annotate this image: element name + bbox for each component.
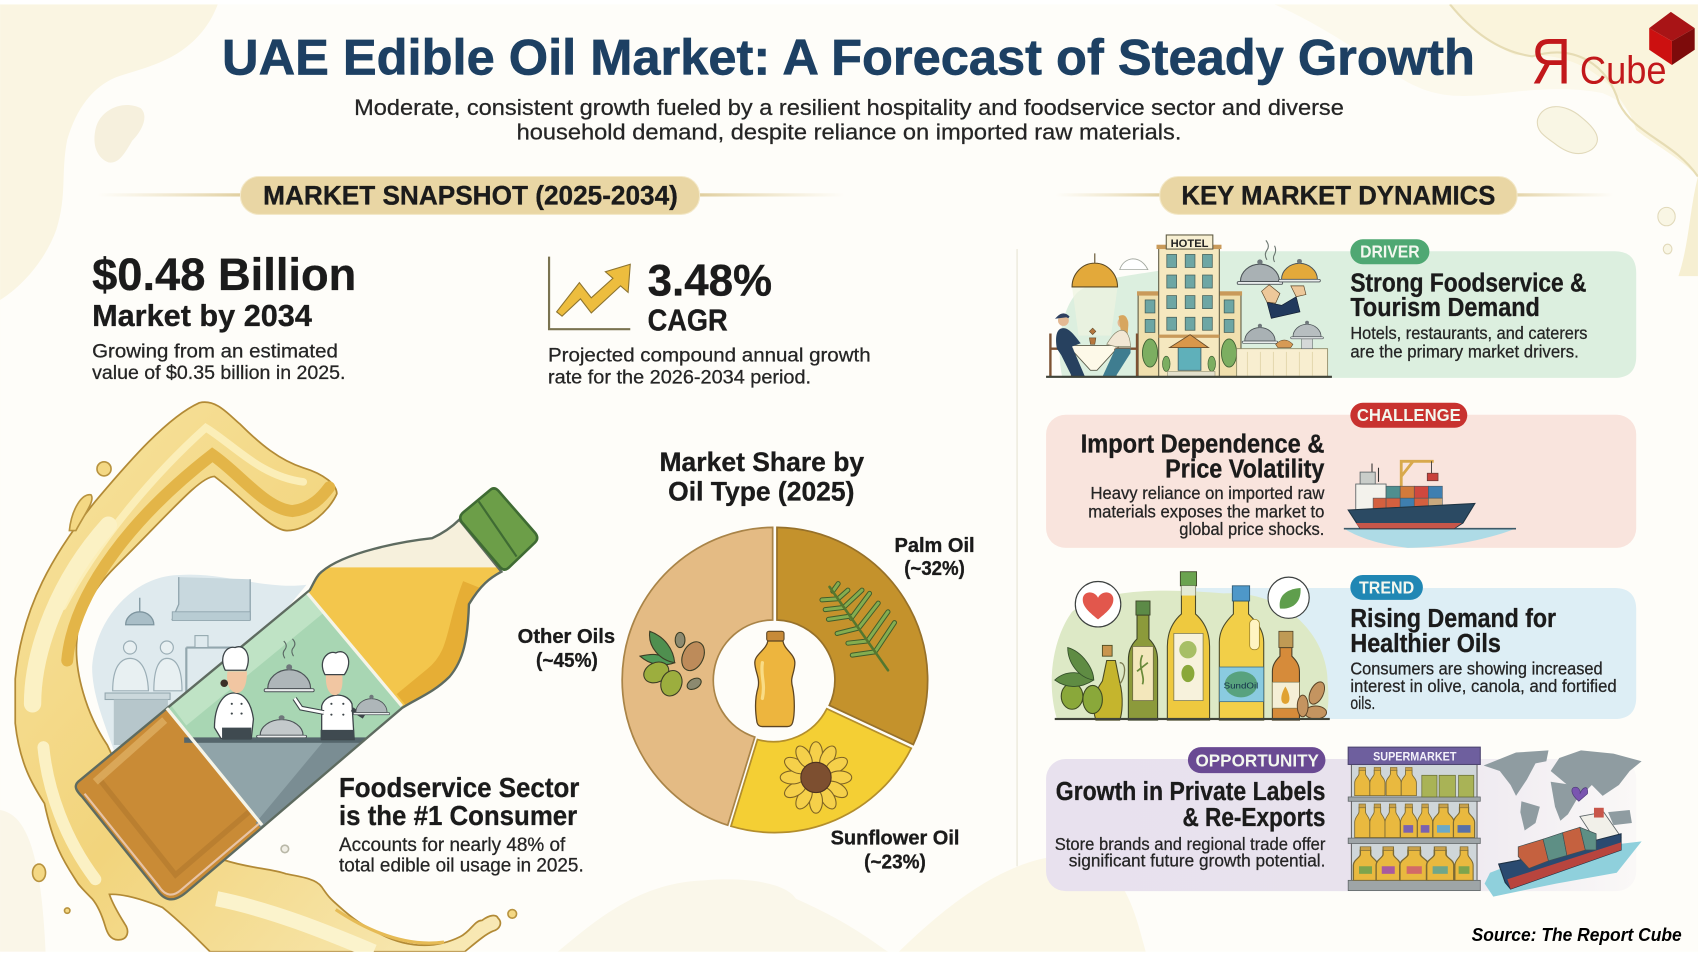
card text: & Re-Exports [1183, 802, 1325, 832]
card text [1350, 267, 1588, 361]
panel: driver [1046, 235, 1636, 378]
bottom white band [0, 952, 1698, 961]
logo: RCube: Cube [1580, 49, 1667, 92]
card text: are the primary market drivers. [1350, 341, 1579, 361]
heading: market share: Oil Type (2025) [668, 475, 854, 506]
card text [1081, 429, 1325, 539]
illustration: world map and trade ship [1484, 750, 1642, 897]
panel: opportunity [1046, 747, 1642, 897]
background: left oval [94, 105, 144, 163]
title: UAE Edible Oil Market: A Forecast of Steady Growth [222, 30, 1475, 86]
stat: market value: value of $0.35 billion in 2025. [92, 362, 345, 384]
card background [1046, 415, 1636, 548]
card background [1046, 759, 1636, 891]
badge label: DRIVER [1360, 242, 1420, 262]
text block: foodservice sector: Accounts for nearly 48% of [339, 834, 566, 856]
source note: Source: The Report Cube [1472, 924, 1682, 945]
card text: Growth in Private Labels [1056, 776, 1325, 806]
background: right droplets [1537, 107, 1675, 254]
stat: CAGR: rate for the 2026-2034 period. [548, 366, 811, 388]
subtitle [354, 95, 1344, 145]
card text: Hotels, restaurants, and caterers [1350, 323, 1588, 343]
label: sunflower oil [831, 827, 959, 873]
card text: oils. [1350, 693, 1375, 713]
background: bottom-left cream [0, 810, 46, 952]
stat: CAGR: CAGR [648, 304, 728, 337]
label: other oils: (~45%) [536, 649, 598, 672]
stat: market value: $0.48 Billion [92, 249, 356, 300]
illustration: oil splash [15, 402, 500, 952]
card background [1060, 251, 1636, 378]
badge: challenge [1350, 403, 1467, 428]
badge: driver [1350, 239, 1429, 264]
card text: materials exposes the market to [1088, 502, 1324, 522]
badge label: CHALLENGE [1357, 405, 1461, 425]
card text: Tourism Demand [1350, 292, 1540, 322]
text block: foodservice sector [339, 772, 584, 877]
card text: significant future growth potential. [1069, 850, 1325, 870]
background: top-left cream wave [0, 4, 218, 300]
illustration: oil bottle [74, 518, 504, 900]
badge label: OPPORTUNITY [1196, 751, 1319, 771]
card text: interest in olive, canola, and fortified [1350, 676, 1617, 696]
illustration: healthy oil bottles: SundOil [1224, 681, 1258, 691]
label: sunflower oil: (~23%) [864, 850, 926, 873]
illustration: chefs with cloches [214, 639, 390, 740]
card text [1350, 603, 1617, 713]
card text: Import Dependence & [1081, 429, 1324, 459]
slice: other oils [622, 527, 773, 825]
subtitle: household demand, despite reliance on imported raw materials. [517, 120, 1181, 145]
label: other oils: Other Oils [518, 625, 615, 648]
text block: foodservice sector: total edible oil usage in 2025. [339, 855, 584, 877]
stat: market value [92, 249, 356, 384]
background: bottom-right cream hill [899, 855, 1146, 952]
stat: CAGR: 3.48% [648, 257, 772, 306]
label: palm oil: Palm Oil [894, 534, 975, 557]
stat: market value: Market by 2034 [92, 300, 312, 333]
card text: Store brands and regional trade offer [1055, 834, 1326, 854]
illustration: hotel and dining [1046, 235, 1332, 378]
illustration: healthy oil bottles [1052, 572, 1330, 720]
heading: market share [660, 446, 864, 506]
illustration: cargo ship [1344, 461, 1516, 548]
label: palm oil [894, 534, 975, 580]
background: top-right light wave [1275, 4, 1698, 176]
logo: RCube [1531, 12, 1695, 97]
card text: Price Volatility [1165, 454, 1325, 484]
card text: Healthier Oils [1350, 628, 1501, 658]
panel: market snapshot heading [98, 176, 845, 214]
icon: oil droplets [33, 462, 517, 918]
stat: market value: Growing from an estimated [92, 340, 338, 362]
panel: key market dynamics heading [1056, 176, 1613, 214]
panel: trend [1052, 572, 1636, 720]
card text: global price shocks. [1179, 519, 1324, 539]
heading: market share: Market Share by [660, 446, 864, 477]
icon: growth chart [549, 257, 630, 329]
illustration: supermarket shelf: SUPERMARKET [1373, 750, 1457, 764]
icon: palm leaf [822, 584, 894, 670]
card text: Consumers are showing increased [1350, 659, 1603, 679]
icon: olives and nuts [640, 631, 709, 699]
card text: Heavy reliance on imported raw [1090, 483, 1325, 503]
illustration: hotel and dining: HOTEL [1171, 238, 1209, 250]
icon: sunflower [780, 742, 852, 813]
icon: bottle cap [460, 488, 537, 570]
stat: CAGR: Projected compound annual growth [548, 345, 871, 367]
badge label: TREND [1359, 577, 1414, 597]
background: top-right golden wave [1450, 4, 1698, 176]
panel: challenge [1046, 403, 1636, 548]
label: sunflower oil: Sunflower Oil [831, 827, 959, 850]
donut chart: market share by oil type [518, 527, 975, 873]
label: other oils [518, 625, 615, 672]
illustration: supermarket shelf [1348, 747, 1480, 891]
top white band [0, 0, 1698, 4]
label: palm oil: (~32%) [904, 557, 965, 580]
text block: foodservice sector: is the #1 Consumer [339, 800, 577, 831]
panel: key market dynamics heading: KEY MARKET DYNAMICS [1181, 180, 1495, 211]
card background [1191, 588, 1636, 719]
slice: palm oil [777, 527, 928, 745]
logo: RCube: Я [1531, 24, 1571, 97]
card text: Rising Demand for [1350, 603, 1556, 633]
slice: sunflower oil [731, 709, 911, 833]
card text: Strong Foodservice & [1350, 267, 1586, 297]
panel: market snapshot heading: MARKET SNAPSHOT (2025-2034) [263, 180, 678, 211]
subtitle: Moderate, consistent growth fueled by a resilient hospitality and foodservice sector and diverse [354, 95, 1344, 120]
background: wave outline [1450, 4, 1698, 176]
card text [1055, 776, 1326, 870]
text block: foodservice sector: Foodservice Sector [339, 772, 579, 803]
badge: opportunity [1188, 747, 1325, 773]
stat: CAGR [548, 257, 871, 388]
background: right edge sliver [1678, 176, 1698, 276]
illustration: kitchen background [92, 575, 307, 753]
badge: trend [1350, 575, 1423, 600]
background: bottom-center wave [558, 879, 888, 952]
icon: center oil bottle [755, 631, 795, 727]
